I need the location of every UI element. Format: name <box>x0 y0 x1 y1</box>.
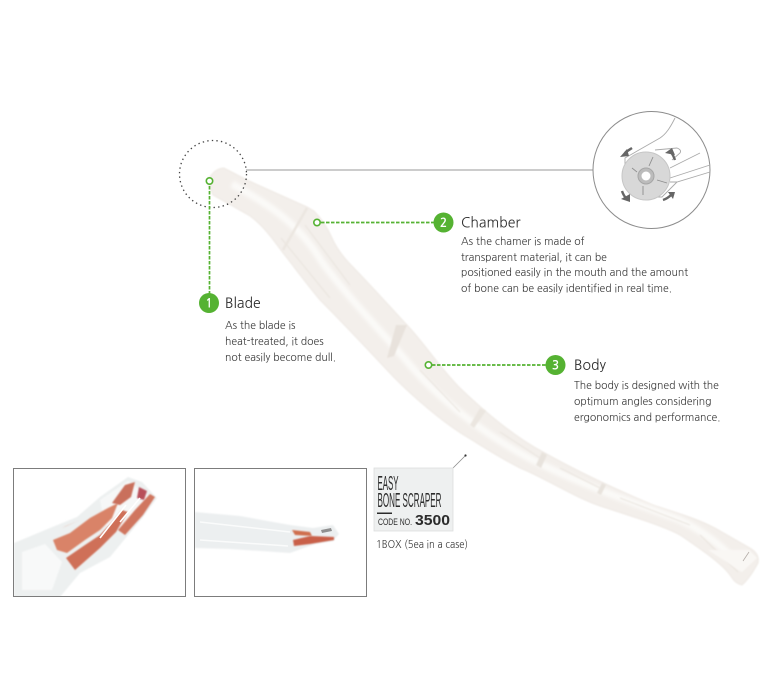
arrow icons <box>622 148 675 200</box>
label: 2 Chamber: of bone can be easily identified in real time. <box>461 283 672 294</box>
label: 2 Chamber: 2 <box>440 217 447 229</box>
product label: Easy Bone Scraper code 3500: BONE SCRAPER <box>378 490 442 512</box>
label: 3 Body: Body <box>574 358 606 373</box>
label: 1 Blade: not easily become dull. <box>225 352 336 363</box>
product label: Easy Bone Scraper code 3500: CODE NO. <box>378 517 412 528</box>
package note: 1BOX (5ea in a case) <box>376 539 468 550</box>
product label: Easy Bone Scraper code 3500: 3500 <box>415 512 450 529</box>
label: 1 Blade <box>199 293 336 363</box>
blade callout line <box>206 178 213 294</box>
label: 2 Chamber <box>434 212 688 294</box>
dotted circle around blade tip <box>180 140 246 208</box>
label: 3 Body <box>546 355 720 423</box>
label: 2 Chamber: Chamber <box>461 216 521 230</box>
body callout line <box>425 362 546 368</box>
connector line to detail view <box>246 169 593 171</box>
label: 2 Chamber: As the chamer is made of <box>461 236 585 247</box>
label: 2 Chamber: transparent material, it can be <box>461 252 607 263</box>
photo: chamber side view <box>194 468 366 596</box>
label: 2 Chamber: positioned easily in the mouth and the amount <box>461 267 688 278</box>
chamber callout line <box>314 219 434 226</box>
bone scraper product <box>207 168 758 585</box>
product label: Easy Bone Scraper code 3500: EASY <box>378 473 398 495</box>
label: 3 Body: ergonomics and performance. <box>574 412 720 423</box>
label: 3 Body: optimum angles considering <box>574 396 712 407</box>
label: 3 Body: The body is designed with the <box>574 380 719 391</box>
detail view circle: blade rotation <box>593 112 710 228</box>
label: 1 Blade: heat-treated, it does <box>225 336 324 347</box>
label: 3 Body: 3 <box>552 360 559 372</box>
product label: Easy Bone Scraper code 3500 <box>374 454 467 531</box>
label: 1 Blade: As the blade is <box>225 320 296 331</box>
label: 1 Blade: Blade <box>225 296 261 311</box>
photo: bone chips in chamber close-up <box>14 468 186 597</box>
label: 1 Blade: 1 <box>205 298 213 310</box>
